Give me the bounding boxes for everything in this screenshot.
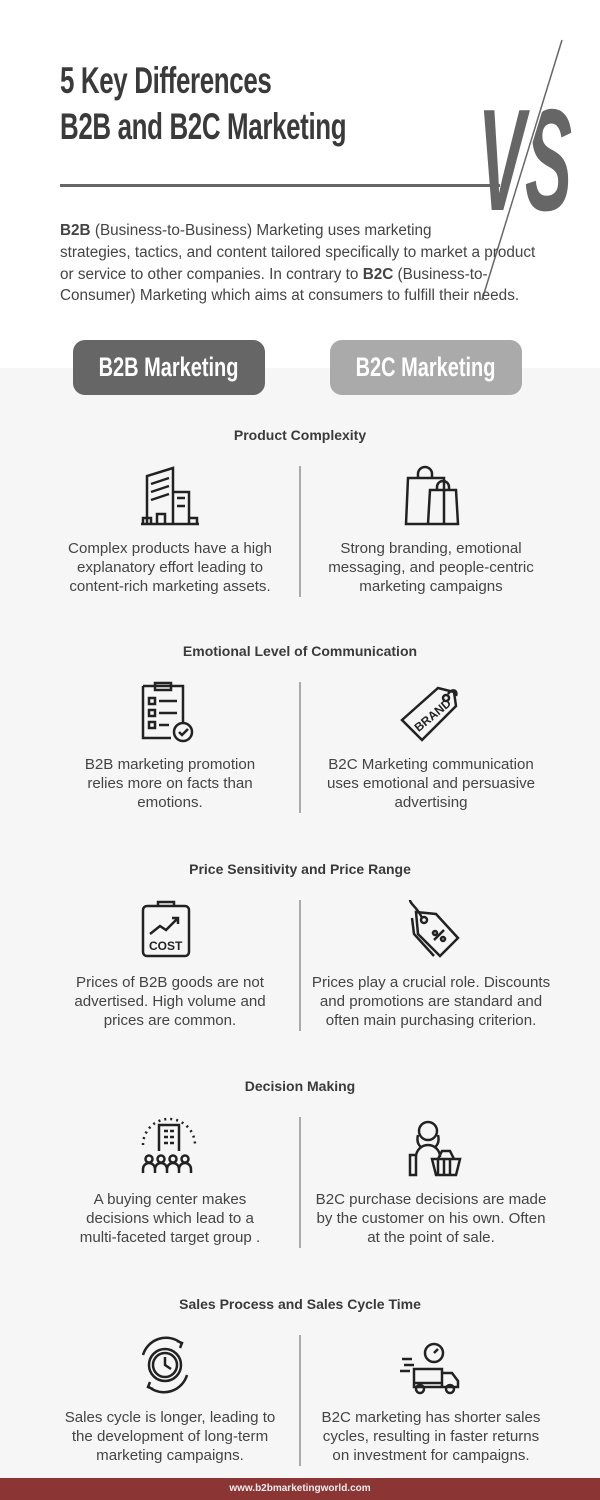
intro paragraph: B2B (Business-to-Business) Marketing uses marketing: [60, 222, 432, 239]
text: B2C: B2C Marketing communication: [328, 756, 534, 773]
text: B2C: Strong branding, emotional: [340, 540, 522, 557]
section: Emotional Level of Communication: [85, 643, 535, 813]
heading: Product Complexity: [234, 427, 366, 443]
text: B2B: emotions.: [137, 794, 203, 811]
text: B2B: A buying center makes: [94, 1191, 246, 1208]
text: B2C: advertising: [394, 794, 468, 811]
VS emblem: [478, 40, 572, 300]
button: B2B Marketing: B2B Marketing: [99, 352, 239, 382]
icon: shopping bags: [404, 466, 460, 526]
text: B2C: and promotions are standard and: [320, 993, 542, 1010]
icon: checklist: [142, 682, 194, 742]
text: B2C: cycles, resulting in faster returns: [323, 1428, 539, 1445]
intro paragraph: or service to other companies. In contrary to B2C (Business-to-: [60, 266, 488, 283]
icon: brand tag: BRAND: [412, 696, 454, 735]
button: B2C Marketing: B2C Marketing: [356, 352, 496, 382]
icon: brand tag: [400, 686, 458, 742]
text: B2B: [80, 1191, 260, 1246]
text: B2B: B2B marketing promotion: [85, 756, 255, 773]
text: B2B: the development of long-term: [72, 1428, 268, 1445]
title: [60, 60, 346, 147]
text: B2B: advertised. High volume and: [74, 993, 266, 1010]
text: B2C: B2C marketing has shorter sales: [322, 1409, 540, 1426]
text: B2B: Prices of B2B goods are not: [76, 974, 264, 991]
section: Price Sensitivity and Price Range: [74, 861, 550, 1031]
icon: cost board: COST: [149, 939, 183, 953]
text: B2B: content-rich marketing assets.: [69, 578, 271, 595]
text: B2B: [68, 540, 272, 595]
icon: delivery truck: [400, 1342, 460, 1394]
icon: clock cycle: [142, 1336, 188, 1394]
text: B2C: on investment for campaigns.: [332, 1447, 530, 1464]
text: B2B: [65, 1409, 275, 1464]
text: B2B: Complex products have a high: [68, 540, 272, 557]
text: B2B: [74, 974, 266, 1029]
footer: www.b2bmarketingworld.com: [229, 1483, 371, 1494]
text: B2B: [85, 756, 255, 811]
title: 5 Key Differences: [60, 60, 271, 101]
text: B2B: multi-faceted target group .: [80, 1229, 260, 1246]
text: B2C: often main purchasing criterion.: [326, 1012, 536, 1029]
title: B2B and B2C Marketing: [60, 106, 346, 147]
heading: Emotional Level of Communication: [183, 643, 417, 659]
section: Decision Making: [80, 1078, 546, 1248]
text: B2C: uses emotional and persuasive: [327, 775, 535, 792]
footer: [0, 1478, 600, 1500]
icon: building: [141, 466, 199, 526]
text: B2B: Sales cycle is longer, leading to: [65, 1409, 275, 1426]
text: B2C: by the customer on his own. Often: [316, 1210, 546, 1227]
text: B2C: marketing campaigns: [359, 578, 503, 595]
section: Product Complexity: [68, 427, 534, 597]
icon: shopper with basket: [408, 1120, 462, 1176]
text: B2C: [322, 1409, 540, 1464]
text: B2B: prices are common.: [104, 1012, 236, 1029]
text: B2C: [312, 974, 550, 1029]
button: B2B Marketing: [73, 340, 265, 395]
text: B2B: decisions which lead to a: [86, 1210, 254, 1227]
intro paragraph: [60, 222, 536, 304]
header divider line: [60, 184, 500, 187]
text: B2B: relies more on facts than: [87, 775, 253, 792]
intro paragraph: strategies, tactics, and content tailored specifically to market a product: [60, 244, 535, 261]
text: B2C: Prices play a crucial role. Discounts: [312, 974, 550, 991]
heading: Decision Making: [245, 1078, 355, 1094]
section: Sales Process and Sales Cycle Time: [65, 1296, 540, 1466]
text: B2C: messaging, and people-centric: [328, 559, 534, 576]
text: B2C: [327, 756, 535, 811]
icon: cost board: [142, 900, 190, 958]
text: B2B: marketing campaigns.: [96, 1447, 244, 1464]
intro paragraph: Consumer) Marketing which aims at consumers to fulfill their needs.: [60, 287, 519, 304]
heading: Price Sensitivity and Price Range: [189, 861, 411, 877]
text: B2C: at the point of sale.: [367, 1229, 495, 1246]
text: B2B: explanatory effort leading to: [77, 559, 263, 576]
text: B2C: [328, 540, 534, 595]
heading: Sales Process and Sales Cycle Time: [179, 1296, 421, 1312]
gray background band: [0, 368, 600, 1478]
text: B2C: B2C purchase decisions are made: [316, 1191, 546, 1208]
icon: buying center: [142, 1118, 196, 1173]
icon: price tags: [408, 900, 460, 958]
text: B2C: [316, 1191, 546, 1246]
button: B2C Marketing: [330, 340, 522, 395]
